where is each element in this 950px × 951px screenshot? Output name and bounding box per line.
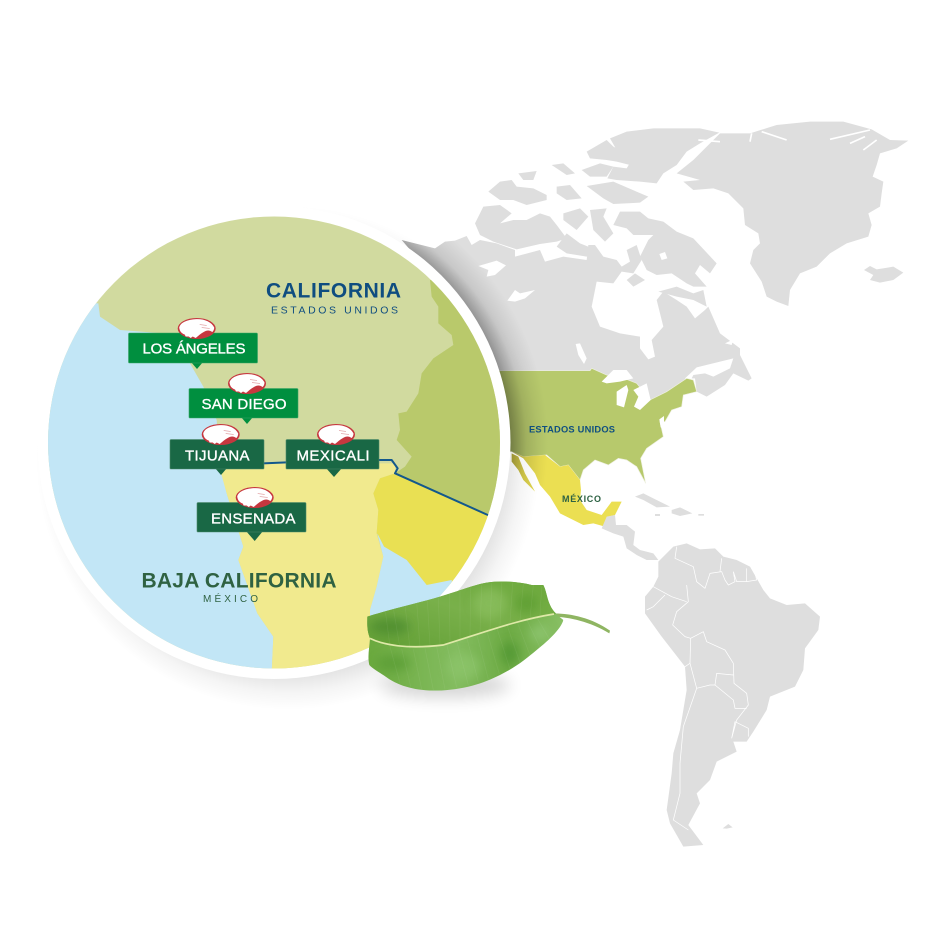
border line [263, 460, 490, 516]
marker: Tijuana [170, 424, 264, 475]
Sonora [373, 473, 497, 585]
leaf body [367, 582, 564, 690]
marker: Ensenada [197, 487, 306, 541]
shadow on land from circle [402, 240, 540, 490]
illustration: banana leaf [367, 582, 610, 690]
landmass: Central America and Caribbean [602, 493, 704, 560]
marker: Los Ángeles: LOS ÁNGELES [142, 340, 246, 358]
landmass: Canada [402, 128, 752, 410]
sea [48, 303, 274, 668]
world map: Americas [380, 122, 908, 847]
gulf [370, 534, 452, 616]
lakes and bays [478, 252, 733, 383]
upper half [367, 582, 556, 646]
marker: Mexicali: MEXICALI [296, 448, 370, 464]
country: México [512, 452, 622, 527]
circle shadow [36, 206, 540, 710]
heading: California: CALIFORNIA [266, 280, 401, 302]
landmass: South America [645, 543, 820, 847]
label: México: MÉXICO [562, 494, 601, 504]
heading: Baja California: BAJA CALIFORNIA [142, 570, 336, 592]
regional map [48, 216, 500, 668]
Arctic islands [475, 128, 719, 307]
landmass: Iceland [864, 266, 903, 283]
panel: zoomed circle map [48, 216, 510, 679]
stem [550, 614, 610, 633]
landmass: Greenland [677, 122, 908, 306]
tone patches [370, 588, 550, 680]
marker: San Diego: SAN DIEGO [202, 396, 286, 413]
marker: Los Ángeles [128, 318, 258, 369]
Baja California [218, 463, 395, 673]
sub-heading: Estados Unidos: ESTADOS UNIDOS [271, 304, 398, 316]
leaf shadow [380, 672, 510, 698]
country: Estados Unidos [480, 368, 697, 483]
neighbouring states [396, 280, 500, 515]
label: Estados Unidos: ESTADOS UNIDOS [529, 424, 615, 434]
marker: San Diego [189, 373, 298, 424]
marker: Mexicali [286, 424, 379, 477]
marker: Ensenada: ENSENADA [211, 510, 296, 528]
white ring [38, 206, 510, 679]
marker: Tijuana: TIJUANA [185, 448, 250, 464]
veins [385, 583, 550, 690]
sub-heading: México: MÉXICO [203, 592, 258, 605]
midrib [370, 614, 554, 647]
lower half [367, 582, 564, 690]
